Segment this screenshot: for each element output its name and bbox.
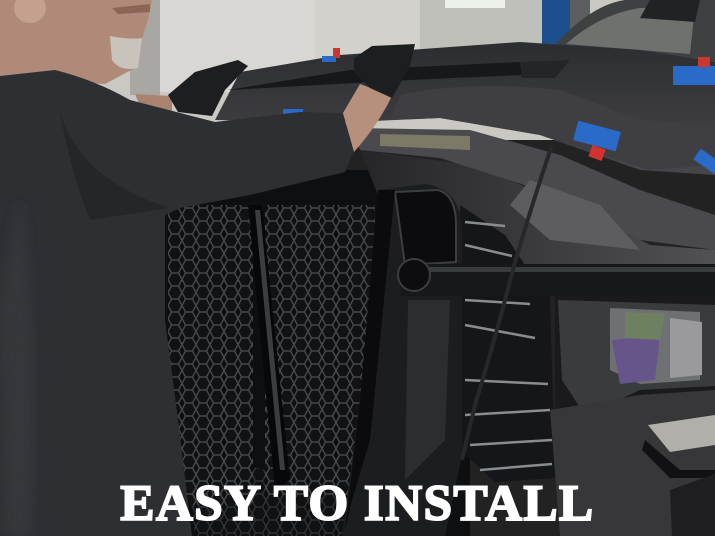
- garage background wall: [0, 0, 715, 140]
- lower bumper: [550, 390, 715, 536]
- man's head and neck: [0, 0, 152, 84]
- truck hood and deflector: [215, 42, 715, 300]
- grille backing: [165, 170, 470, 536]
- horizontal guard tube: [398, 259, 715, 296]
- title caption: EASY TO INSTALL: [120, 476, 595, 532]
- black gloved hand on the deflector: [354, 44, 415, 98]
- man's left wrist: [135, 94, 172, 112]
- man's forearm: [343, 84, 392, 152]
- bull bar guard upright: [342, 184, 462, 536]
- hanging cable: [462, 145, 552, 460]
- black gloved left hand: [168, 60, 248, 116]
- man's dark long-sleeve shirt and arm: [0, 70, 355, 536]
- honeycomb grille: [168, 205, 555, 536]
- headlight: [555, 296, 715, 416]
- blue painter's tape pieces: [283, 48, 715, 174]
- truck windshield: [552, 0, 715, 62]
